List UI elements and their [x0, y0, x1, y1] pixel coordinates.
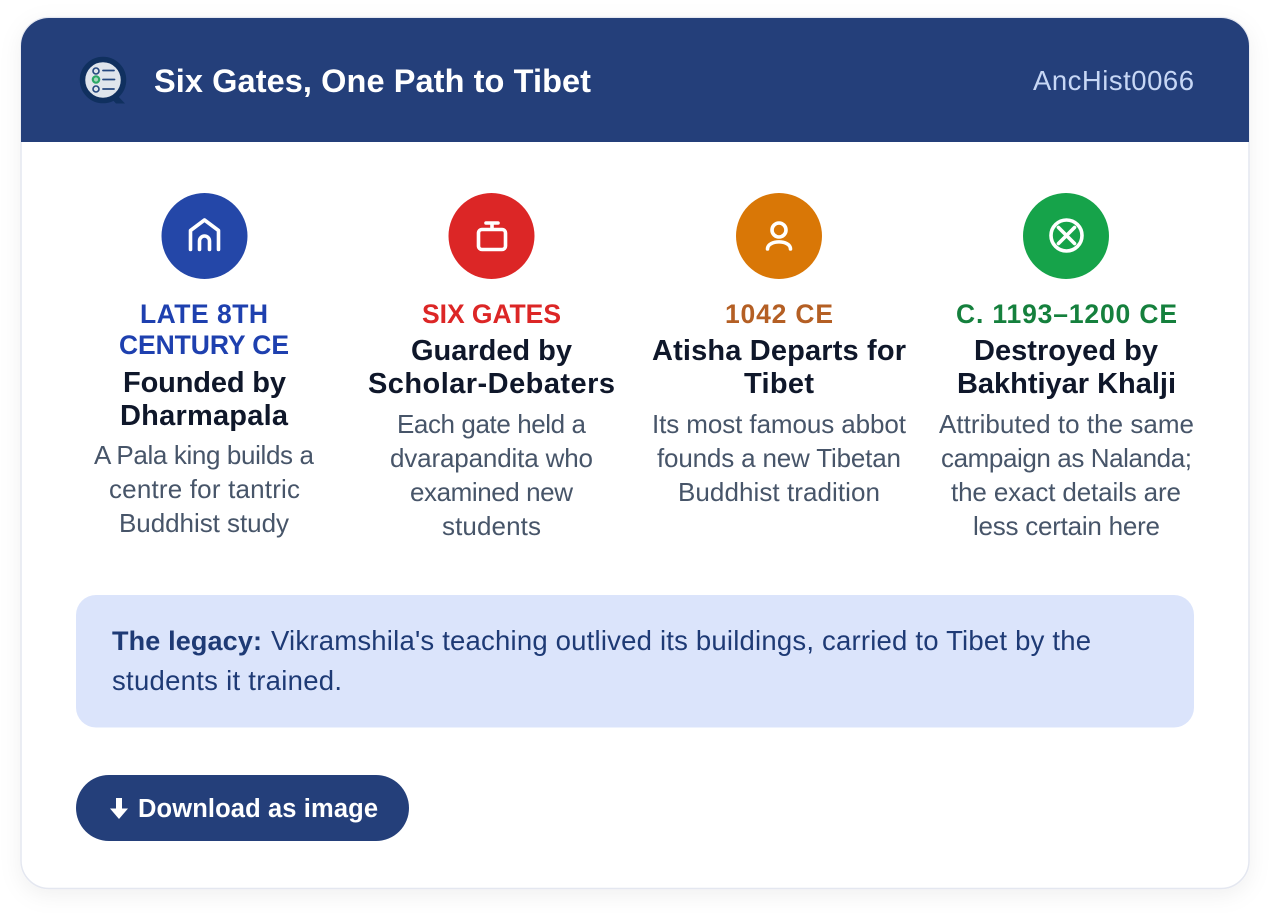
milestone: founded — [94, 193, 315, 538]
heading — [652, 335, 906, 400]
icon: house — [162, 193, 248, 279]
download button: Download as image — [138, 795, 378, 823]
icon: gate — [448, 193, 534, 279]
icon: crossed circle — [1023, 193, 1109, 279]
icon: person — [736, 193, 822, 279]
callout: the legacy — [76, 595, 1194, 728]
description: less certain here — [973, 511, 1160, 541]
heading: Bakhtiyar Khalji — [957, 368, 1176, 400]
title: Six Gates, One Path to Tibet — [154, 63, 591, 99]
date label: 1042 CE — [725, 299, 833, 329]
description: students — [442, 511, 541, 541]
heading: Guarded by — [411, 335, 572, 367]
icon: down arrow — [110, 798, 128, 819]
description: centre for tantric — [109, 474, 300, 504]
description: dvarapandita who — [390, 443, 593, 473]
description: founds a new Tibetan — [657, 443, 901, 473]
date label: SIX GATES — [422, 299, 561, 329]
header band — [21, 18, 1249, 142]
date label: LATE 8TH — [140, 299, 268, 329]
description: Attributed to the same — [939, 409, 1194, 439]
heading: Founded by — [123, 367, 286, 399]
heading — [368, 335, 615, 400]
heading — [957, 335, 1176, 400]
heading: Destroyed by — [974, 335, 1158, 367]
milestone: six gates — [368, 193, 615, 541]
description: campaign as Nalanda; — [941, 443, 1192, 473]
description: Its most famous abbot — [652, 409, 907, 439]
description: Buddhist study — [119, 508, 289, 538]
description: examined new — [410, 477, 573, 507]
icon: quiz logo — [82, 60, 125, 104]
heading: Scholar-Debaters — [368, 368, 615, 400]
download button — [76, 775, 409, 841]
callout: the legacy: Vikramshila's teaching outlived its buildings, carried to Tibet by the — [271, 625, 1091, 656]
description: the exact details are — [951, 477, 1181, 507]
milestone: atisha — [652, 193, 907, 507]
description — [390, 409, 593, 541]
callout: the legacy: The legacy: — [112, 626, 262, 656]
heading: Atisha Departs for — [652, 335, 906, 367]
description: A Pala king builds a — [94, 440, 315, 470]
milestone: destroyed — [939, 193, 1194, 541]
reference code: AncHist0066 — [1033, 65, 1194, 96]
date label — [119, 299, 289, 360]
description: Each gate held a — [397, 409, 587, 439]
description — [652, 409, 907, 507]
date label: C. 1193–1200 CE — [956, 299, 1177, 329]
heading — [120, 367, 289, 432]
date label: CENTURY CE — [119, 330, 289, 360]
description — [939, 409, 1194, 541]
heading: Tibet — [744, 368, 814, 400]
description — [94, 440, 315, 538]
description: Buddhist tradition — [678, 477, 880, 507]
callout: the legacy: students it trained. — [112, 665, 342, 696]
heading: Dharmapala — [120, 400, 289, 432]
